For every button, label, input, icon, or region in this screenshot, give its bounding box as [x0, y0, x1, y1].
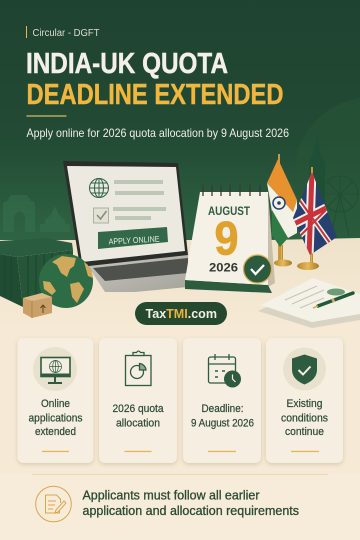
card: deadline: [183, 338, 261, 463]
card: existing conditions: [266, 338, 343, 463]
card: 2026 quota allocation: [99, 338, 177, 463]
calendar: check badge: [244, 255, 272, 283]
desk calendar: [185, 185, 275, 293]
subtitle: Apply online for 2026 quota allocation by 9 August 2026: [26, 127, 289, 140]
footer band: [0, 474, 360, 540]
laptop base: [80, 254, 188, 292]
background: London Eye silhouette: [322, 176, 358, 236]
footer rule: [32, 473, 328, 476]
India flag: [267, 154, 297, 266]
background: decorative arc: [294, 97, 360, 253]
card text: extended: [35, 426, 76, 438]
background: India Gate silhouette: [3, 195, 70, 232]
background: green header: [0, 0, 360, 245]
icon: document with pencil: [36, 486, 71, 522]
laptop lid: [63, 161, 188, 267]
calendar stand: [268, 192, 275, 287]
card text: Existing: [286, 398, 322, 410]
laptop screen: [67, 166, 185, 262]
title: [26, 48, 284, 111]
card text: Deadline:: [202, 403, 244, 415]
card text: allocation: [116, 418, 160, 430]
UK flag: [290, 167, 337, 270]
brand pill: TaxTMI.com: [135, 302, 227, 325]
pen: [313, 293, 353, 308]
card text: 9 August 2026: [191, 418, 254, 430]
icon: clipboard with pie chart: [126, 351, 151, 386]
icon: calendar with clock: [208, 354, 241, 388]
title rule: [26, 115, 66, 117]
screen: apply online button: APPLY ONLINE: [108, 234, 160, 246]
container: [0, 238, 73, 307]
card text: [28, 398, 83, 438]
card accent line: [42, 451, 69, 452]
calendar: month: AUGUST: [208, 206, 250, 218]
title: INDIA-UK QUOTA: [26, 48, 228, 80]
background: Big Ben silhouette: [309, 135, 325, 240]
card text: conditions: [281, 412, 329, 424]
card accent line: [291, 451, 319, 452]
laptop: [63, 161, 188, 292]
screen: globe icon: [90, 178, 108, 198]
calendar base: [185, 280, 272, 293]
calendar rings: [203, 185, 260, 196]
card text: [191, 403, 254, 430]
globe: [39, 254, 93, 308]
icon: monitor with globe: [33, 347, 77, 391]
brand pill: TaxTMI.com: TaxTMI.com: [146, 306, 217, 321]
card accent line: [124, 451, 152, 452]
footer note: Applicants must follow all earlier: [82, 488, 260, 502]
card text: applications: [28, 412, 83, 424]
screen: checkbox: [94, 208, 108, 223]
documents with pen: [258, 278, 360, 328]
calendar page: [185, 192, 268, 285]
card: online applications: [18, 338, 94, 463]
screen: text lines: [113, 180, 166, 220]
calendar: day: 9: [214, 212, 238, 264]
title: DEADLINE EXTENDED: [26, 79, 284, 111]
calendar: year: 2026: [209, 260, 238, 274]
footer note: [82, 488, 299, 518]
kicker: Circular - DGFT: Circular - DGFT: [32, 28, 100, 39]
card text: continue: [285, 426, 324, 438]
footer note: application and allocation requirements: [82, 504, 299, 518]
floor: [0, 238, 360, 540]
icon: shield with check: [283, 348, 326, 390]
card text: [281, 398, 329, 438]
page lower background: [0, 330, 360, 540]
cardboard box: [23, 293, 52, 318]
card text: Online: [41, 398, 70, 410]
card text: [112, 403, 164, 430]
card accent line: [208, 451, 236, 452]
card text: 2026 quota: [112, 403, 164, 415]
